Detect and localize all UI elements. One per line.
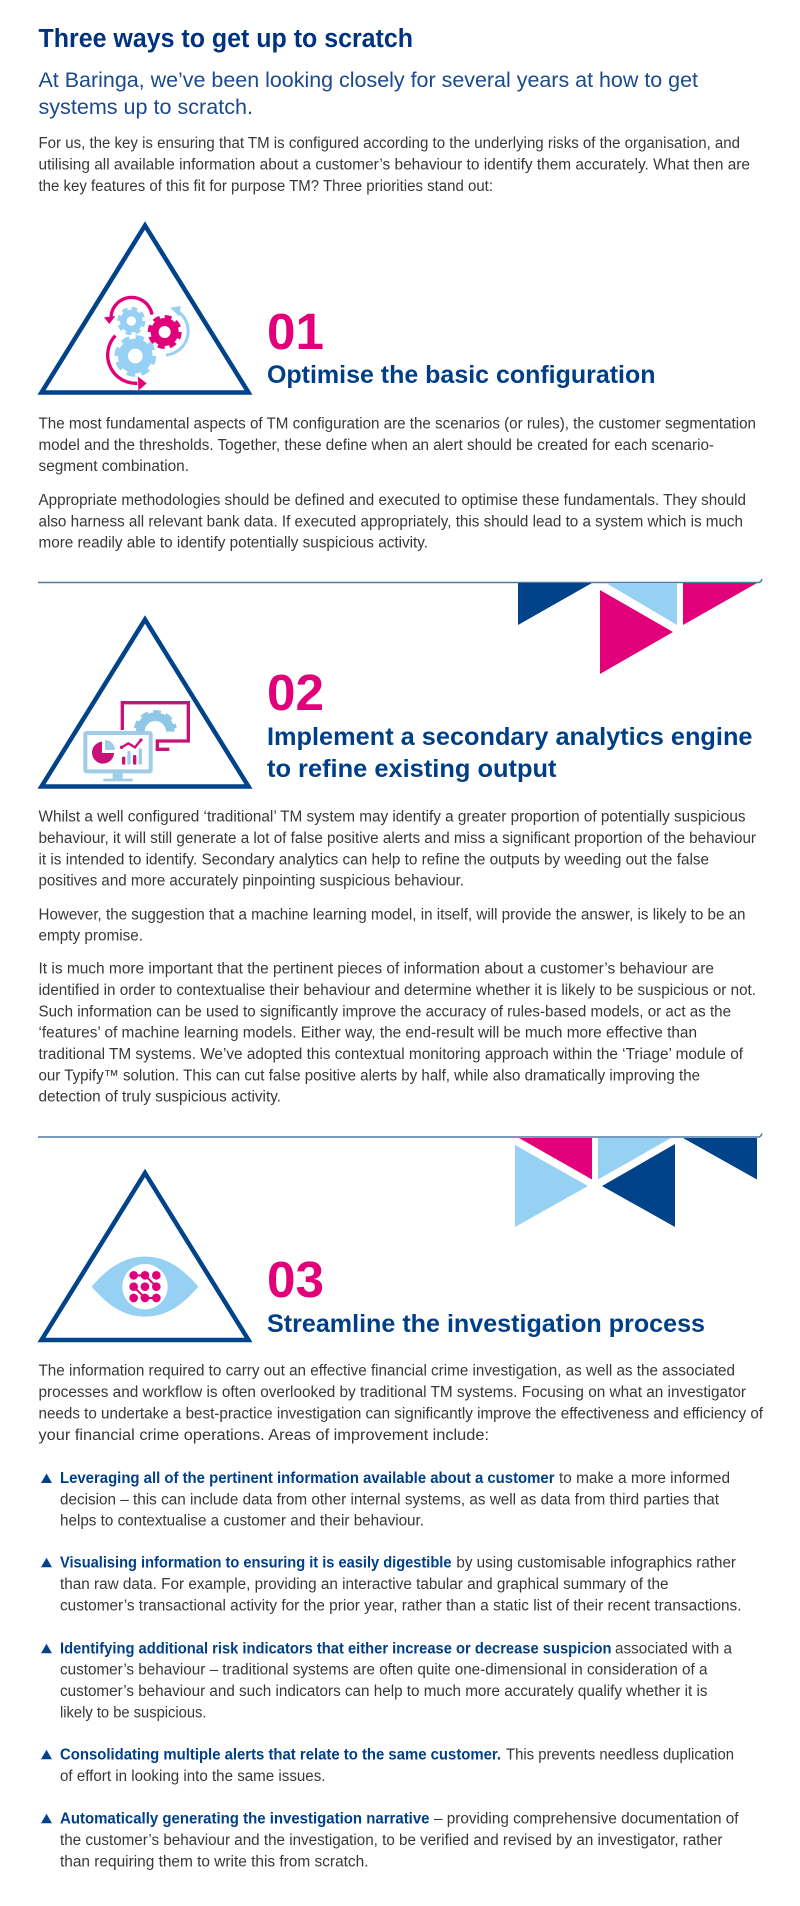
heading: Streamline the investigation process xyxy=(267,1310,705,1338)
bullet: consolidating alerts: Consolidating multiple alerts that relate to the same customer. xyxy=(60,1746,501,1763)
body text: your financial crime operations. Areas of improvement include: xyxy=(38,1427,489,1444)
bullet: investigation narrative: Automatically generating the investigation narrative xyxy=(60,1810,430,1827)
bullet: visualising information: Visualising information to ensuring it is easily digestible xyxy=(60,1554,452,1571)
bullet: additional risk indicators: customer’s behaviour – traditional systems are often quite one-dimensional in consideration of a xyxy=(60,1662,708,1679)
subtitle: At Baringa, we’ve been looking closely for several years at how to get xyxy=(38,68,698,92)
bullet: leveraging information xyxy=(41,1470,730,1530)
panel: section 02 xyxy=(38,620,756,1106)
body text xyxy=(38,415,756,552)
body text: Such information can be used to significantly improve the accuracy of rules-based models, or act as the xyxy=(38,1003,731,1020)
icon: triangle with eye xyxy=(42,1173,248,1340)
body text: The information required to carry out an effective financial crime investigation, as well as the associated xyxy=(38,1363,735,1380)
body text: traditional TM systems. We’ve adopted this contextual monitoring approach within the ‘Triage’ module of xyxy=(38,1046,744,1063)
intro text: For us, the key is ensuring that TM is configured according to the underlying risks of the organisation, and xyxy=(38,135,740,152)
intro text: the key features of this fit for purpose TM? Three priorities stand out: xyxy=(38,178,493,195)
icon: triangle with gears xyxy=(42,226,248,392)
body text: needs to undertake a best-practice investigation can significantly improve the effectiveness and efficiency of xyxy=(38,1406,764,1422)
bullet: investigation narrative: the customer’s behaviour and the investigation, to be verified and revised by an investigator, rather xyxy=(60,1832,722,1849)
bullet: additional risk indicators: associated with a xyxy=(615,1640,732,1657)
body text: also harness all relevant bank data. If executed appropriately, this should lead to a system which is much xyxy=(38,513,743,530)
bullet: additional risk indicators xyxy=(41,1640,732,1721)
subtitle: systems up to scratch. xyxy=(38,95,253,119)
bullet: consolidating alerts: This prevents needless duplication xyxy=(506,1746,734,1763)
bullet: investigation narrative: – providing comprehensive documentation of xyxy=(434,1810,739,1827)
body text: empty promise. xyxy=(38,928,143,945)
panel: introduction xyxy=(38,25,750,195)
decorative banner: divider two with triangles xyxy=(38,1134,762,1227)
body text: Whilst a well configured ‘traditional’ TM system may identify a greater proportion of potentially suspicious xyxy=(38,809,746,826)
bullet: visualising information: by using customisable infographics rather xyxy=(456,1554,736,1571)
body text xyxy=(38,1363,764,1444)
bullet: visualising information xyxy=(41,1554,742,1615)
body text: It is much more important that the pertinent pieces of information about a customer’s behaviour are xyxy=(38,960,714,978)
bullet: leveraging information: decision – this can include data from other internal systems, as well as data from third parties that xyxy=(60,1491,720,1508)
panel: section 03 xyxy=(38,1173,764,1871)
body text: identified in order to contextualise their behaviour and determine whether it is likely to be suspicious or not. xyxy=(38,982,756,999)
heading xyxy=(267,723,753,783)
body text: our Typify™ solution. This can cut false positive alerts by half, while also dramatically improving the xyxy=(38,1067,700,1084)
bullet: additional risk indicators: customer’s behaviour and such indicators can help to much more accurately qualify whether it is xyxy=(60,1683,708,1700)
title: Three ways to get up to scratch xyxy=(38,25,413,53)
body text: more readily able to identify potentially suspicious activity. xyxy=(38,534,428,552)
bullet: investigation narrative: than requiring them to write this from scratch. xyxy=(60,1854,368,1871)
bullet: leveraging information: helps to contextualise a customer and their behaviour. xyxy=(60,1513,424,1530)
intro text xyxy=(38,135,750,195)
bullet: leveraging information: Leveraging all of the pertinent information available about a customer xyxy=(60,1470,554,1487)
icon: triangle with monitors xyxy=(42,620,248,786)
body text xyxy=(38,809,756,1106)
body text: behaviour, it will still generate a lot of false positive alerts and miss a significant proportion of the behaviour xyxy=(38,830,756,847)
bullet: consolidating alerts xyxy=(41,1746,734,1785)
heading: to refine existing output xyxy=(267,755,557,783)
body text: segment combination. xyxy=(38,458,189,475)
bullet: consolidating alerts: of effort in looking into the same issues. xyxy=(60,1768,326,1785)
bullet: additional risk indicators: Identifying additional risk indicators that either increase or decrease suspicion xyxy=(60,1640,612,1657)
bullet: additional risk indicators: likely to be suspicious. xyxy=(60,1704,206,1721)
bullet: investigation narrative xyxy=(41,1810,739,1871)
bullet: leveraging information: to make a more informed xyxy=(559,1470,730,1487)
number 01: 01 xyxy=(267,303,324,360)
body text: model and the thresholds. Together, these define when an alert should be created for each scenario- xyxy=(38,437,714,454)
bullet: visualising information: customer’s transactional activity for the prior year, rather than a static list of their recent transactions. xyxy=(60,1598,742,1615)
body text: However, the suggestion that a machine learning model, in itself, will provide the answer, is likely to be an xyxy=(38,906,746,923)
body text: ‘features’ of machine learning models. Either way, the end-result will be much more effective than xyxy=(38,1024,697,1042)
body text: Appropriate methodologies should be defined and executed to optimise these fundamentals. They should xyxy=(38,492,746,509)
heading: Optimise the basic configuration xyxy=(267,361,656,389)
body text: processes and workflow is often overlooked by traditional TM systems. Focusing on what an investigator xyxy=(38,1384,746,1401)
body text: detection of truly suspicious activity. xyxy=(38,1088,281,1106)
body text: positives and more accurately pinpointing suspicious behaviour. xyxy=(38,873,464,890)
intro text: utilising all available information about a customer’s behaviour to identify them accurately. What then are xyxy=(38,156,750,174)
decorative banner: divider one with triangles xyxy=(38,579,762,674)
body text: The most fundamental aspects of TM configuration are the scenarios (or rules), the customer segmentation xyxy=(38,415,756,432)
heading: Implement a secondary analytics engine xyxy=(267,723,753,751)
bullet: visualising information: than raw data. For example, providing an interactive tabular and graphical summary of the xyxy=(60,1576,668,1593)
body text: it is intended to identify. Secondary analytics can help to refine the outputs by weeding out the false xyxy=(38,851,709,868)
subtitle xyxy=(38,68,698,119)
number 02: 02 xyxy=(267,664,324,721)
number 03: 03 xyxy=(267,1251,324,1308)
panel: section 01 xyxy=(38,226,756,552)
